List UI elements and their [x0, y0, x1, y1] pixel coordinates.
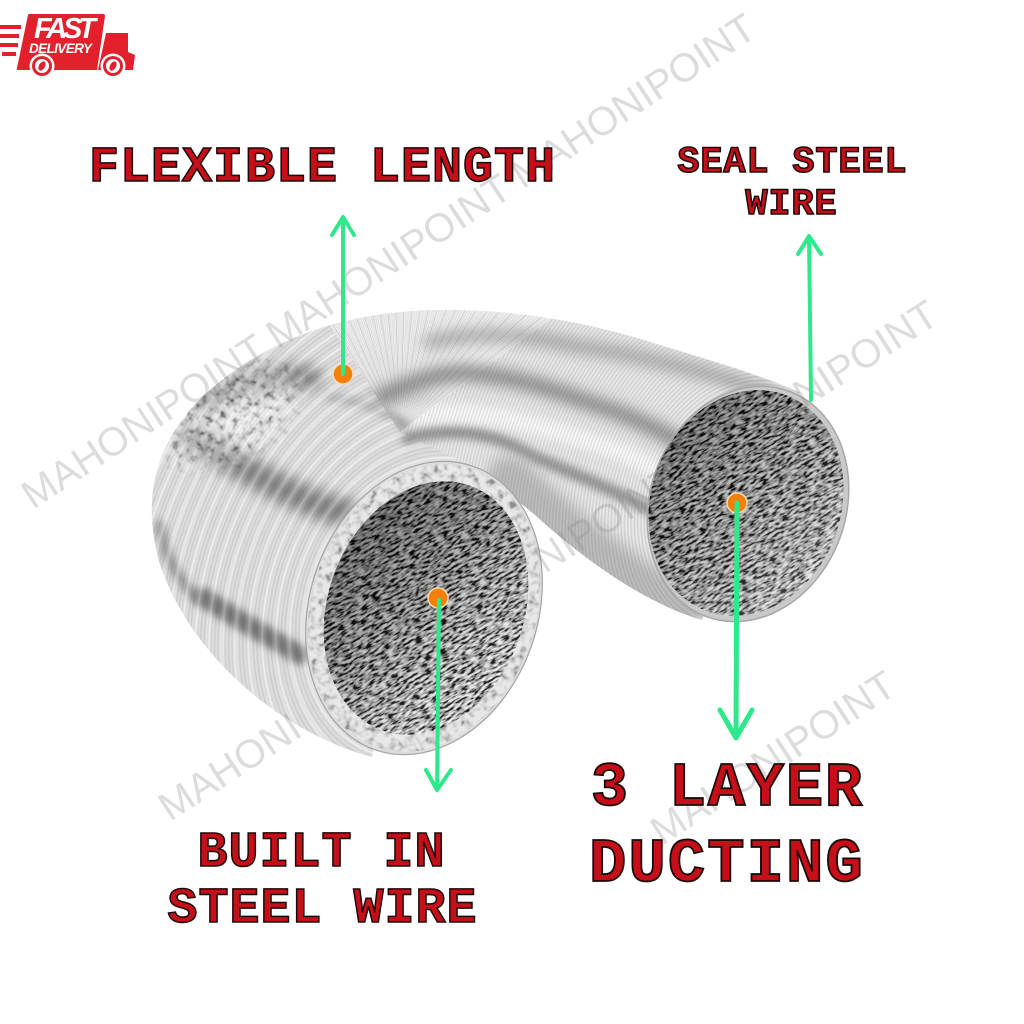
duct: flexible tube body [152, 310, 800, 757]
fast delivery text: FAST [34, 13, 98, 45]
speed lines [0, 25, 21, 56]
icon: fast delivery truck [0, 13, 135, 78]
wheels [30, 54, 126, 78]
label: built in steel wire: STEEL WIRE [167, 881, 477, 938]
arrow: built in steel wire [426, 588, 451, 790]
watermarks: NIPOINT [526, 457, 687, 582]
label: flexible length: FLEXIBLE LENGTH [89, 140, 555, 197]
label: 3 layer ducting: 3 LAYER [591, 753, 863, 824]
label: 3 layer ducting: DUCTING [589, 829, 863, 900]
label: seal steel wire: WIRE [745, 184, 837, 226]
watermarks: MAHONI [151, 706, 309, 830]
ribs: left leg rings [152, 326, 466, 757]
arrow: flexible length [332, 217, 354, 384]
arrow: seal steel wire [798, 236, 821, 400]
watermarks [14, 6, 946, 854]
arrow: 3 layer ducting [720, 493, 752, 738]
watermarks: MAHONIPOINT MAHONIPOINT MAHONIPOINT [14, 6, 764, 518]
watermarks: MAHONIPOINT [643, 663, 904, 854]
truck body [17, 14, 105, 70]
watermarks: NIPOINT [785, 292, 946, 417]
dark bands [160, 335, 770, 655]
truck cab [98, 33, 135, 70]
duct: right opening with foil lining [646, 386, 850, 622]
ribs: bend fan [330, 310, 552, 432]
duct: left opening with foil rim and lining [305, 460, 543, 756]
crinkled foil patch [166, 359, 307, 479]
label: built in steel wire: BUILT IN [197, 825, 445, 882]
label: seal steel wire: SEAL STEEL [677, 142, 907, 184]
ribs: right leg rings [400, 318, 800, 620]
icon: fast delivery truck: DELIVERY [29, 41, 94, 56]
